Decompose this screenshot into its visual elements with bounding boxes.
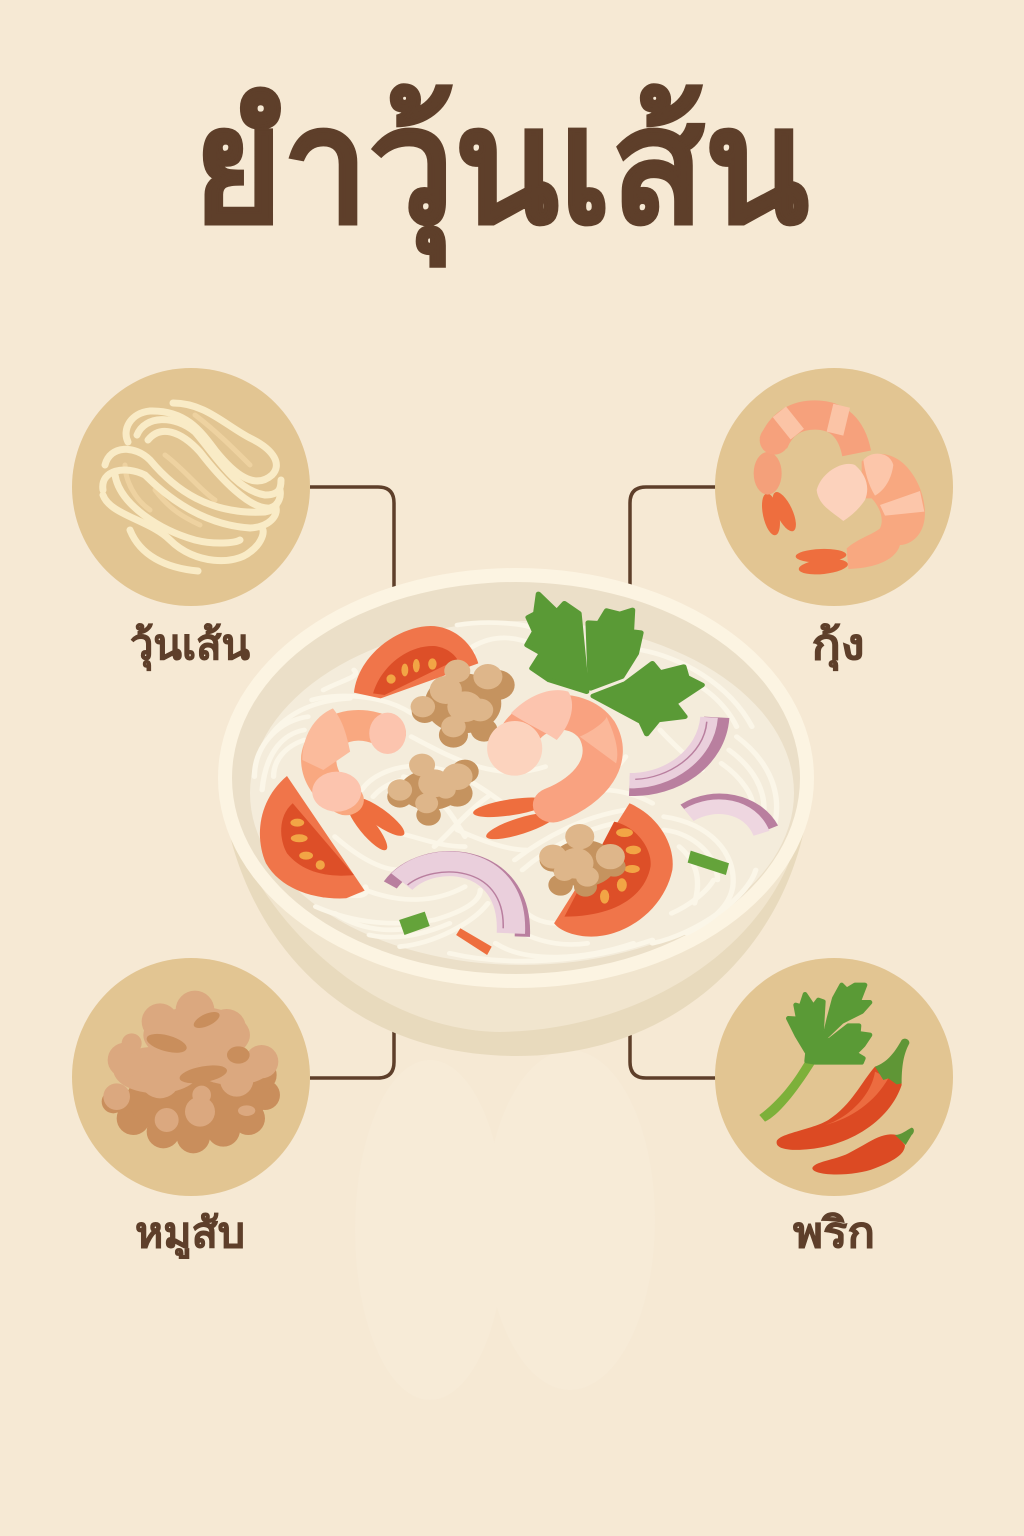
shrimp right: [472, 690, 617, 844]
green onion and chili bits: [399, 851, 729, 955]
ingredient: chili and herb: [715, 958, 953, 1196]
tomato wedge left: [260, 776, 365, 898]
tomato wedge right: [554, 803, 673, 937]
onion slice bottom: [390, 858, 522, 937]
ingredient: shrimp: [715, 368, 953, 606]
pork piece 3: [539, 824, 626, 897]
cilantro herb: [527, 594, 702, 734]
tomato wedge top: [354, 626, 478, 698]
noodles: [254, 623, 777, 961]
label: minced pork: หมูสับ: [135, 1209, 245, 1259]
onion slice upper right: [629, 717, 717, 785]
label: glass noodles: วุ้นเส้น: [130, 621, 250, 671]
connector: pork to bowl: [310, 1025, 394, 1078]
pork piece 1: [411, 660, 515, 748]
background glow: [355, 1050, 655, 1400]
bowl: [218, 568, 814, 1056]
label: shrimp: กุ้ง: [812, 621, 864, 671]
connector: noodles to bowl: [310, 487, 394, 590]
connector: shrimp to bowl: [630, 487, 716, 590]
title: ยำวุ้นเส้น: [193, 76, 809, 268]
ingredient: glass noodles: [72, 368, 310, 606]
label: chili: พริก: [793, 1209, 875, 1256]
pork piece 2: [387, 754, 479, 826]
connector: chili to bowl: [630, 1025, 716, 1078]
shrimp left: [302, 708, 410, 854]
ingredient: minced pork: [72, 958, 310, 1196]
onion slice right: [685, 800, 771, 833]
